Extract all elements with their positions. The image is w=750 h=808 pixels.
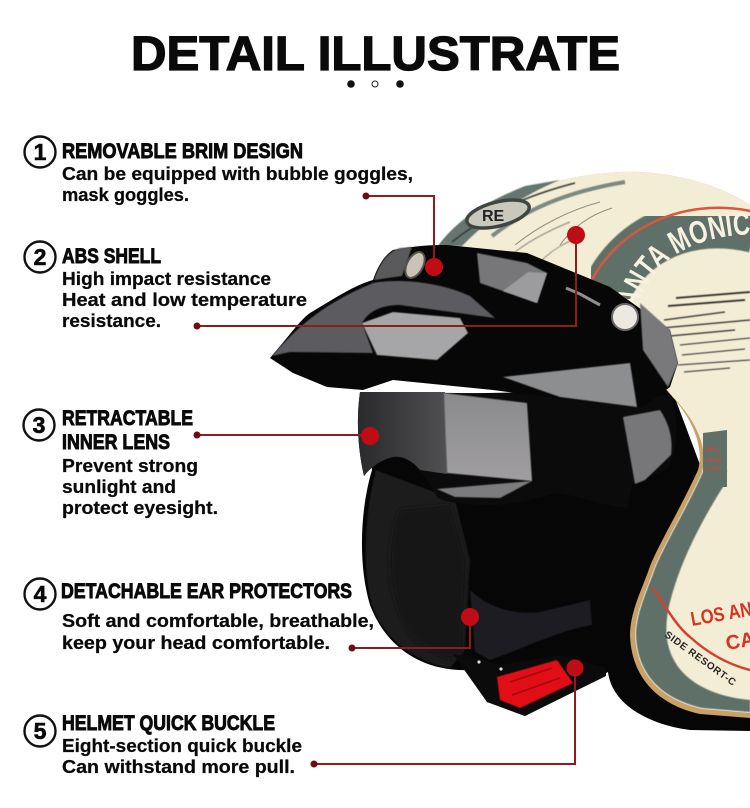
number badge 5: 5 <box>34 718 47 744</box>
quick buckle <box>453 654 606 716</box>
number badge 4 <box>24 578 56 610</box>
heading 3 <box>62 407 193 454</box>
inner lens <box>358 392 676 508</box>
description 5 <box>62 735 302 777</box>
heading 2: ABS SHELL <box>62 245 161 268</box>
description 2 <box>62 268 307 331</box>
rim grey band and lettering: CUP <box>706 467 721 474</box>
helmet shell: RE <box>482 208 505 225</box>
description 1 <box>62 163 413 205</box>
description 3: Prevent strong <box>62 455 198 476</box>
description 2: High impact resistance <box>62 268 271 289</box>
description 1: Can be equipped with bubble goggles, <box>62 163 413 184</box>
heading 3: INNER LENS <box>62 431 170 454</box>
description 5: Eight-section quick buckle <box>62 735 302 756</box>
number badge 3: 3 <box>33 412 45 438</box>
description 1: mask goggles. <box>62 184 189 205</box>
description 5: Can withstand more pull. <box>62 756 295 777</box>
visor rivet left <box>401 249 429 281</box>
description 4 <box>62 610 374 653</box>
description 3: sunlight and <box>62 476 176 497</box>
rim grey band and lettering: AND <box>706 457 721 464</box>
heading 5: HELMET QUICK BUCKLE <box>62 712 275 735</box>
feature 5: helmet quick buckle <box>24 712 302 777</box>
feature 3: retractable inner lens <box>24 407 218 518</box>
feature 1: removable brim design <box>24 136 413 205</box>
ear protector <box>366 470 470 668</box>
heading 1: REMOVABLE BRIM DESIGN <box>62 140 303 163</box>
heading 3: RETRACTABLE <box>62 407 193 430</box>
callout line 1 <box>362 192 443 276</box>
description 3 <box>62 455 218 518</box>
removable brim visor <box>270 245 678 407</box>
number badge 4: 4 <box>34 581 47 607</box>
title decoration dots <box>347 80 404 88</box>
helmet illustration <box>270 172 750 731</box>
feature 2: ABS shell <box>24 242 307 331</box>
description 2: resistance. <box>62 310 161 331</box>
visor rivet right <box>612 304 638 330</box>
handwriting scribbles <box>500 222 750 372</box>
rim grey band and lettering <box>636 430 750 712</box>
number badge 1 <box>24 136 56 168</box>
heading 4: DETACHABLE EAR PROTECTORS <box>61 580 352 603</box>
rim grey band and lettering: SIDE RESORT-C <box>662 630 738 689</box>
rim grey band and lettering: BIS <box>706 447 718 454</box>
description 4: Soft and comfortable, breathable, <box>62 610 374 631</box>
number badge 5 <box>24 716 56 746</box>
description 4: keep your head comfortable. <box>62 632 330 653</box>
chin strap <box>470 590 592 660</box>
feature 4: detachable ear protectors <box>24 578 374 653</box>
description 2: Heat and low temperature <box>62 289 307 310</box>
callout line 2 <box>194 226 585 330</box>
rim and interior silhouette <box>362 390 750 731</box>
number badge 2: 2 <box>34 244 46 270</box>
helmet shell <box>437 172 750 718</box>
callout line 3 <box>194 427 379 445</box>
number badge 3 <box>24 410 54 440</box>
callout line 4 <box>348 608 479 652</box>
number badge 1: 1 <box>34 139 47 165</box>
title: DETAIL ILLUSTRATE <box>131 28 620 81</box>
callout line 5 <box>310 660 584 768</box>
description 3: protect eyesight. <box>62 497 218 518</box>
number badge 2 <box>24 242 56 272</box>
